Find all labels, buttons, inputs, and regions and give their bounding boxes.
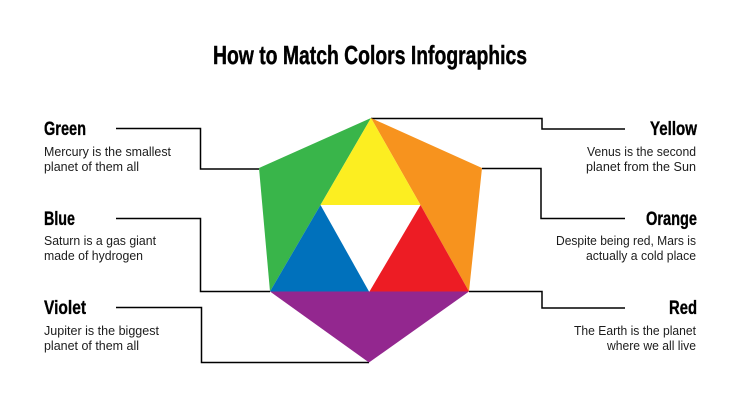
text block: blue bbox=[44, 209, 157, 263]
text block: green: planet of them all bbox=[44, 160, 139, 174]
connector: orange bbox=[482, 168, 625, 218]
segment: green bbox=[259, 118, 371, 292]
segment: violet bbox=[270, 292, 469, 362]
text block: orange: Orange bbox=[646, 209, 697, 230]
color wheel hexagon bbox=[259, 118, 482, 362]
connector: green bbox=[116, 128, 259, 169]
segment: orange bbox=[371, 118, 482, 292]
text block: green: Mercury is the smallest bbox=[44, 145, 172, 159]
text block: red bbox=[574, 298, 697, 353]
text block: orange: actually a cold place bbox=[586, 249, 696, 263]
segment: red bbox=[370, 205, 469, 292]
text block: orange bbox=[556, 209, 697, 263]
text block: violet: Violet bbox=[44, 298, 87, 319]
text block: yellow: Yellow bbox=[650, 119, 697, 140]
text block: yellow bbox=[586, 119, 697, 174]
text block: orange: Despite being red, Mars is bbox=[556, 234, 696, 248]
title: How to Match Colors Infographics bbox=[213, 40, 527, 70]
text block: violet: Jupiter is the biggest bbox=[44, 324, 160, 338]
segment: yellow bbox=[320, 118, 420, 205]
segment: blue bbox=[270, 205, 369, 292]
text block: red: where we all live bbox=[606, 339, 696, 353]
connector: red bbox=[469, 292, 625, 308]
text block: yellow: planet from the Sun bbox=[586, 160, 696, 174]
text block: violet bbox=[44, 298, 160, 353]
text block: green: Green bbox=[44, 119, 86, 140]
text block: violet: planet of them all bbox=[44, 339, 139, 353]
text block: blue: Saturn is a gas giant bbox=[44, 234, 157, 248]
text block: blue: Blue bbox=[44, 209, 75, 230]
connector: violet bbox=[116, 308, 369, 362]
text block: blue: made of hydrogen bbox=[44, 249, 143, 263]
text block: green bbox=[44, 119, 172, 174]
text block: yellow: Venus is the second bbox=[587, 145, 696, 159]
connector: yellow bbox=[371, 118, 625, 129]
connector: blue bbox=[116, 218, 270, 292]
text block: red: Red bbox=[669, 298, 697, 319]
text block: red: The Earth is the planet bbox=[574, 324, 696, 338]
